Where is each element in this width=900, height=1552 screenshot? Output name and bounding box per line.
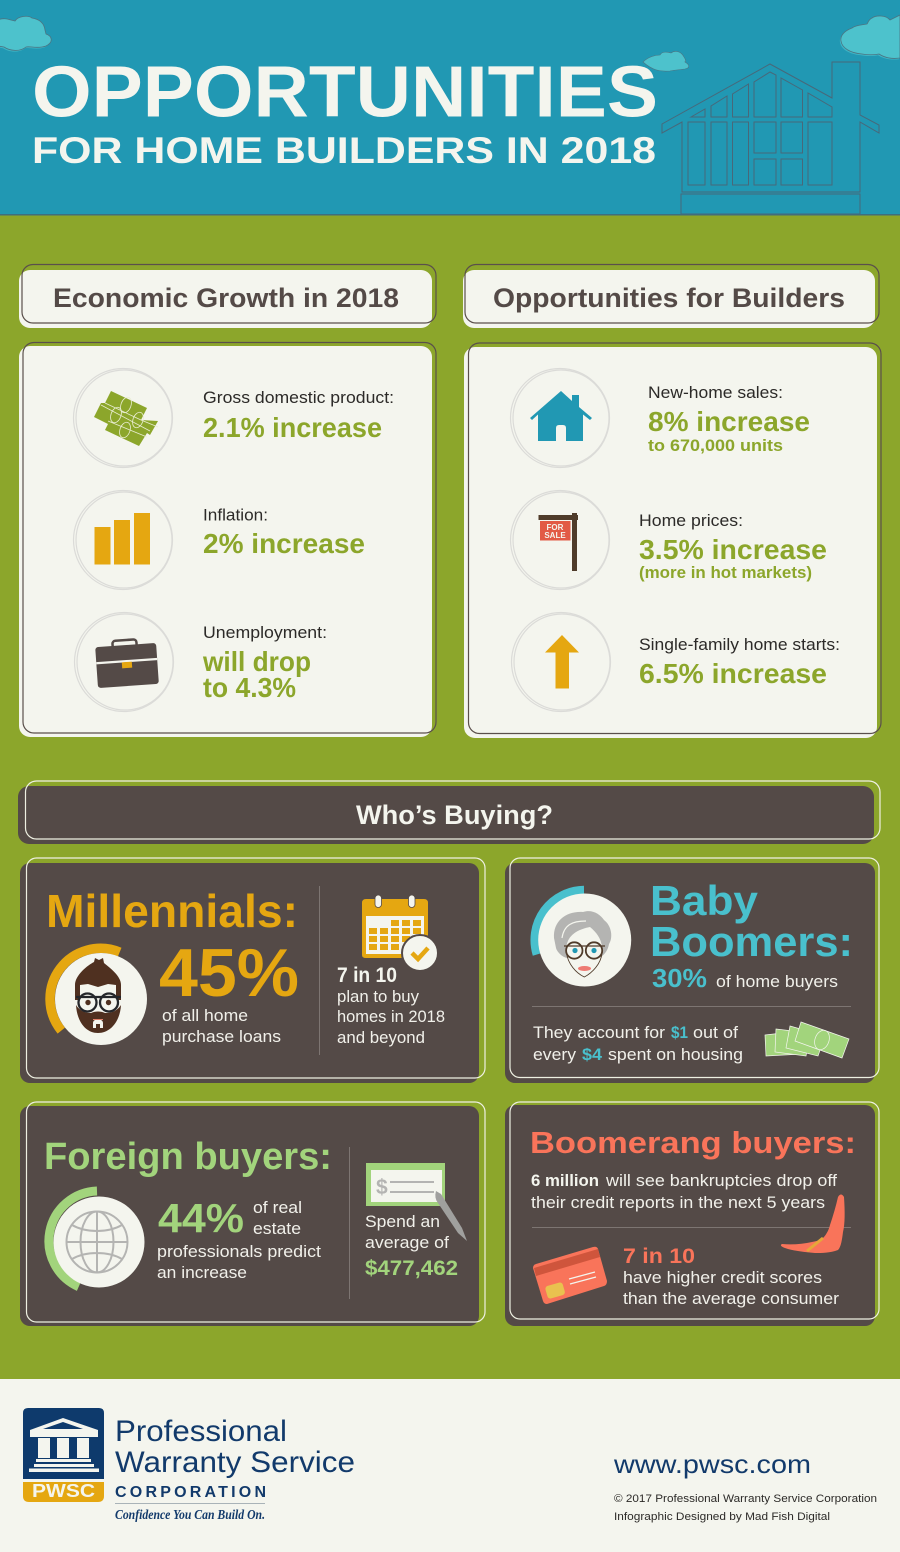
heading: who's buying: Who’s Buying? [356, 800, 553, 830]
text: spend an average of: Spend an [365, 1213, 440, 1231]
text: new-home sales: 8% increase [648, 406, 810, 437]
title: OPPORTUNITIES [32, 52, 658, 132]
stat: 45 percent: 45% [159, 935, 299, 1011]
stat: 44 percent [157, 1195, 321, 1282]
text: home prices: Home prices: [639, 512, 743, 530]
heading: economic growth [19, 264, 436, 328]
new-home sales row [510, 368, 810, 468]
text: gross domestic product: Gross domestic product: [203, 389, 394, 407]
icon: globe with progress ring [49, 1191, 145, 1288]
icon: bearded man with progress ring [50, 948, 147, 1045]
panel: baby boomers [505, 858, 879, 1083]
text: 6 million [531, 1172, 837, 1212]
text: 7 in 10 credit scores [623, 1244, 840, 1308]
icon: briefcase [74, 612, 174, 712]
icon: PWSC logo [23, 1408, 104, 1502]
panel: foreign buyers [20, 1102, 485, 1326]
text: 7 in 10 plan to buy [337, 964, 445, 1047]
website and credits: www.pwsc.com [613, 1449, 811, 1479]
stat: 45 percent [159, 935, 299, 1046]
icon: for sale sign [510, 490, 610, 590]
text: single-family home starts: Single-family home starts: [639, 636, 840, 654]
text: they account for: spent on housing [608, 1046, 743, 1064]
stat: 30 percent [652, 963, 838, 993]
icon: money bills [74, 368, 172, 468]
text: unemployment: Unemployment: [203, 624, 327, 642]
panel: millennials [20, 858, 485, 1083]
icon: fanned bills [765, 1022, 849, 1058]
text: they account for: out of [693, 1024, 738, 1042]
text: 7 in 10 credit scores: 7 in 10 [623, 1244, 695, 1268]
website and credits: Infographic Designed by Mad Fish Digital [614, 1511, 830, 1523]
heading: opportunities for builders: Opportunities for Builders [493, 283, 845, 313]
stat: 44 percent: of real [253, 1199, 302, 1217]
logo wordmark: Warranty Service [115, 1446, 355, 1479]
heading: who's buying [18, 781, 880, 844]
text: 7 in 10 plan to buy: homes in 2018 [337, 1008, 445, 1026]
heading: foreign buyers: Foreign buyers: [44, 1136, 332, 1178]
heading: millennials: Millennials: [46, 885, 298, 937]
icon: up arrow [512, 612, 610, 712]
home prices row [510, 490, 827, 590]
stat: 44 percent: professionals predict [157, 1243, 321, 1261]
panel: boomerang buyers [505, 1102, 879, 1326]
text: they account for: $4 [582, 1045, 603, 1064]
icon: boomerang [781, 1194, 845, 1253]
stat: 44 percent: estate [253, 1220, 301, 1238]
heading: baby boomers: Boomers: [650, 918, 853, 965]
stat: 44 percent: 44% [158, 1195, 244, 1241]
text: single-family home starts: 6.5% increase [639, 658, 827, 689]
text: inflation: Inflation: [203, 506, 268, 524]
title [32, 52, 658, 171]
text: they account for: They account for [533, 1024, 666, 1042]
stat: 30 percent: of home buyers [716, 973, 838, 991]
logo wordmark [115, 1415, 355, 1523]
text: new-home sales: New-home sales: [648, 384, 783, 402]
heading: economic growth: Economic Growth in 2018 [53, 283, 399, 313]
logo wordmark: CORPORATION [115, 1484, 266, 1501]
icon: grandmother with progress ring [535, 890, 631, 986]
icon: bar chart [74, 490, 172, 590]
text: 6 million: their credit reports in the next 5 years [531, 1194, 825, 1212]
text: inflation [203, 506, 365, 559]
inflation row [74, 490, 365, 590]
text: 7 in 10 plan to buy: plan to buy [337, 988, 420, 1006]
icon: for sale sign: SALE [544, 531, 566, 540]
text: 6 million: will see bankruptcies drop off [605, 1172, 837, 1190]
text: 7 in 10 credit scores: have higher credit scores [623, 1269, 822, 1287]
GDP row [74, 368, 394, 468]
logo wordmark: Confidence You Can Build On. [115, 1508, 265, 1523]
text: unemployment: to 4.3% [203, 672, 296, 703]
text: they account for [533, 1023, 743, 1064]
text: spend an average of: average of [365, 1234, 449, 1252]
heading: boomerang buyers: Boomerang buyers: [530, 1125, 856, 1160]
website and credits: © 2017 Professional Warranty Service Corporation [614, 1493, 877, 1505]
text: new-home sales [648, 384, 810, 455]
text: single-family home starts [639, 636, 840, 689]
text: spend an average of: $477,462 [365, 1257, 458, 1280]
heading: baby boomers: Baby [650, 877, 759, 924]
website and credits [613, 1449, 877, 1523]
stat: 44 percent: an increase [157, 1264, 247, 1282]
text: home prices: (more in hot markets) [639, 564, 812, 582]
icon: for sale sign: FOR [547, 523, 564, 532]
header banner [0, 0, 900, 216]
stat: 45 percent: purchase loans [162, 1028, 281, 1046]
text: unemployment [202, 624, 327, 703]
heading: baby boomers [650, 877, 853, 965]
text: new-home sales: to 670,000 units [648, 437, 783, 455]
text: 7 in 10 plan to buy: 7 in 10 [337, 964, 397, 987]
text: 7 in 10 credit scores: than the average consumer [623, 1290, 840, 1308]
home starts row [512, 612, 840, 712]
text: home prices: 3.5% increase [639, 534, 827, 565]
text: gross domestic product: 2.1% increase [203, 412, 382, 443]
stat: 30 percent: 30% [652, 963, 707, 993]
unemployment row [74, 612, 327, 712]
text: gross domestic product [203, 389, 394, 443]
text: 6 million: 6 million [531, 1172, 599, 1190]
text: they account for: $1 [671, 1023, 688, 1042]
heading: opportunities for builders [463, 264, 879, 328]
icon: check and pen: $ [376, 1176, 388, 1199]
stat: 45 percent: of all home [162, 1007, 248, 1025]
icon: clouds [0, 15, 900, 71]
title: FOR HOME BUILDERS IN 2018 [32, 130, 656, 171]
text: they account for: every [533, 1046, 577, 1064]
panel: opportunities for builders [464, 343, 881, 738]
text: 7 in 10 plan to buy: and beyond [337, 1029, 425, 1047]
text: inflation: 2% increase [203, 528, 365, 559]
footer [0, 1379, 900, 1552]
icon: PWSC logo: PWSC [32, 1481, 95, 1501]
icon: calendar [362, 895, 438, 971]
icon: check and pen [366, 1163, 467, 1241]
icon: house [510, 368, 610, 468]
icon: house frame outline [662, 62, 879, 214]
text: home prices [639, 512, 827, 582]
text: unemployment: will drop [202, 646, 311, 677]
icon: credit card [533, 1247, 607, 1304]
text: spend an average of [365, 1213, 458, 1280]
panel: economic growth [19, 342, 436, 737]
logo wordmark: Professional [115, 1415, 287, 1448]
